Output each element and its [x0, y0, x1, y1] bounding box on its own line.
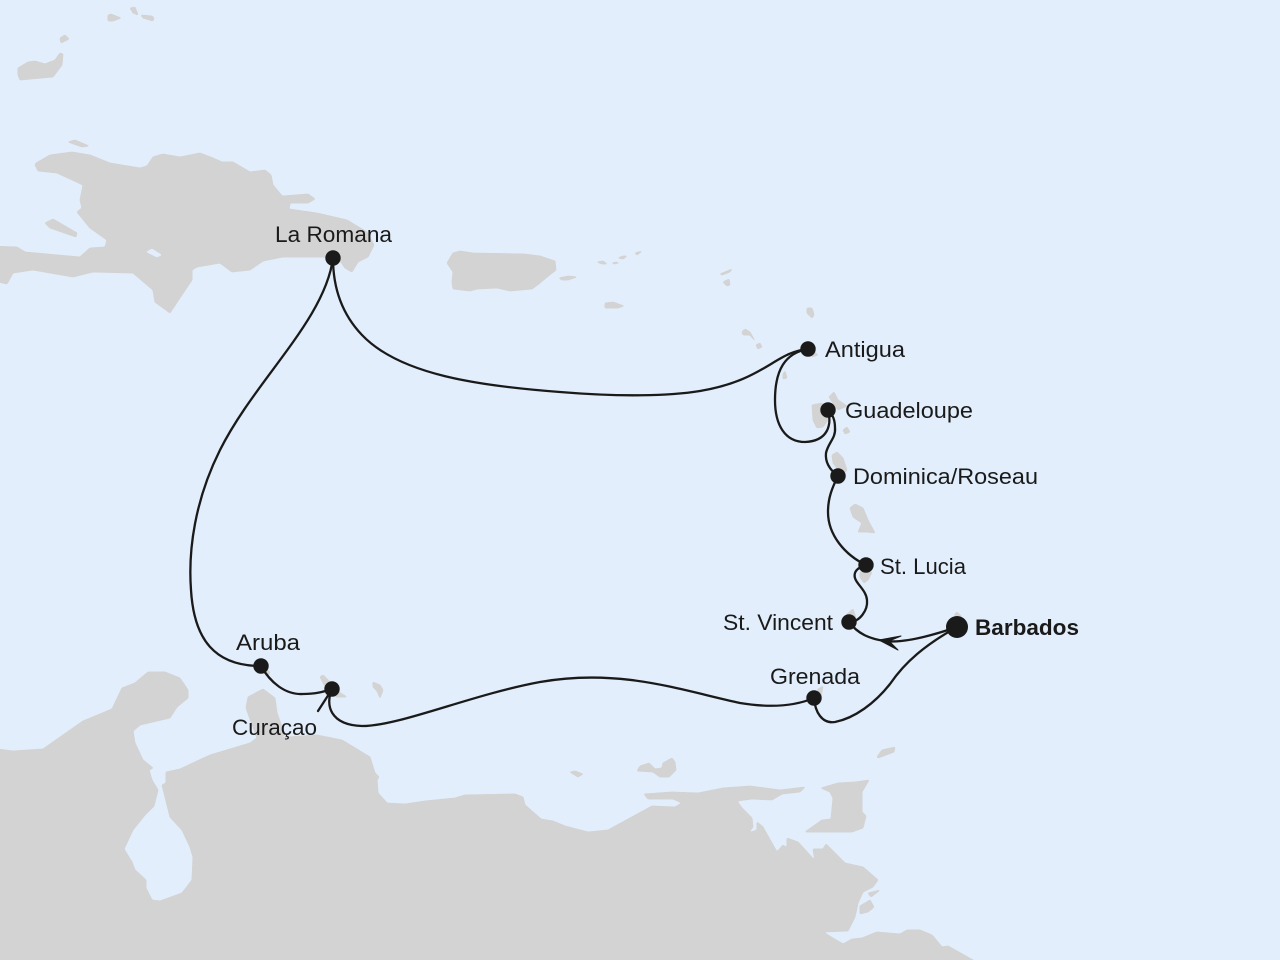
marker: Barbados: [946, 616, 968, 638]
label: St. Vincent: St. Vincent: [723, 610, 833, 635]
label: Antigua: Antigua: [825, 337, 906, 362]
marker: Curacao: [324, 681, 340, 697]
label: Aruba: Aruba: [236, 630, 301, 655]
port markers: [253, 250, 968, 706]
route: St. Lucia to Dominica: [828, 476, 866, 565]
land: Puerto Rico: [447, 251, 556, 291]
label: Guadeloupe: Guadeloupe: [845, 398, 973, 423]
land: ABC islands: [264, 668, 383, 698]
route: St. Vincent to St. Lucia: [849, 565, 867, 622]
route: Aruba to Curacao: [261, 666, 332, 694]
marker: St. Vincent: [841, 614, 857, 630]
land: Bahamas islets: [18, 7, 154, 80]
label: La Romana: La Romana: [275, 222, 393, 247]
label: Barbados: Barbados: [975, 615, 1079, 640]
land: Virgin Islands: [559, 251, 732, 308]
marker: St. Lucia: [858, 557, 874, 573]
arrow barb at Curacao: [318, 694, 329, 711]
land: Lesser Antilles: [742, 308, 962, 697]
port labels: [232, 222, 1079, 740]
land masses: [0, 7, 990, 960]
route: Dominica to Guadeloupe: [826, 410, 838, 476]
route: Curacao to Grenada: [329, 678, 814, 726]
route: Antigua to La Romana: [333, 258, 808, 395]
marker: Grenada: [806, 690, 822, 706]
marker: La Romana: [325, 250, 341, 266]
label: Curacao: Curaçao: [232, 715, 317, 740]
marker: Antigua: [800, 341, 816, 357]
arrowhead: Barbados to St. Vincent: [879, 636, 901, 650]
route: La Romana to Aruba: [190, 258, 333, 666]
marker: Guadeloupe: [820, 402, 836, 418]
land: Hispaniola: [0, 152, 374, 313]
label: St. Lucia: St. Lucia: [880, 554, 967, 579]
cruise route: [190, 258, 957, 726]
marker: Aruba: [253, 658, 269, 674]
label: Dominica/Roseau: Dominica/Roseau: [853, 464, 1038, 489]
marker: Dominica/Roseau: [830, 468, 846, 484]
land: Tobago, Margarita, delta islands: [570, 747, 895, 914]
route: Barbados to St. Vincent: [849, 622, 957, 641]
land: South America: [0, 672, 990, 960]
label: Grenada: Grenada: [770, 664, 861, 689]
route: Grenada to Barbados: [814, 627, 957, 722]
land: Greater Antilles islets: [45, 140, 89, 237]
route: Guadeloupe to Antigua: [775, 349, 829, 442]
land: Trinidad: [805, 780, 869, 832]
